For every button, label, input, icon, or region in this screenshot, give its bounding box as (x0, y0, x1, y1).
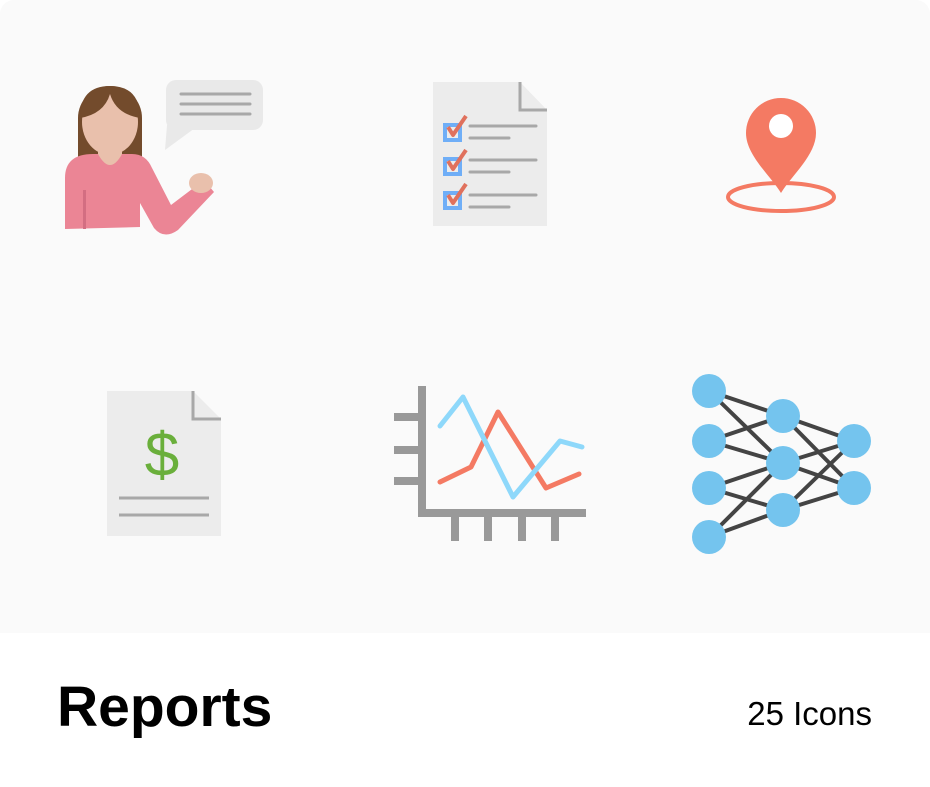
icon: invoice document: $ (145, 421, 179, 490)
icon: location pin (728, 98, 834, 211)
icon: line chart (394, 386, 586, 541)
icon count: 25 Icons (747, 695, 872, 732)
icon: checklist document (433, 82, 547, 226)
icon: invoice document (107, 391, 221, 536)
icon: presenter (65, 80, 263, 235)
title: Reports (57, 675, 272, 739)
icon: neural network (692, 374, 871, 554)
